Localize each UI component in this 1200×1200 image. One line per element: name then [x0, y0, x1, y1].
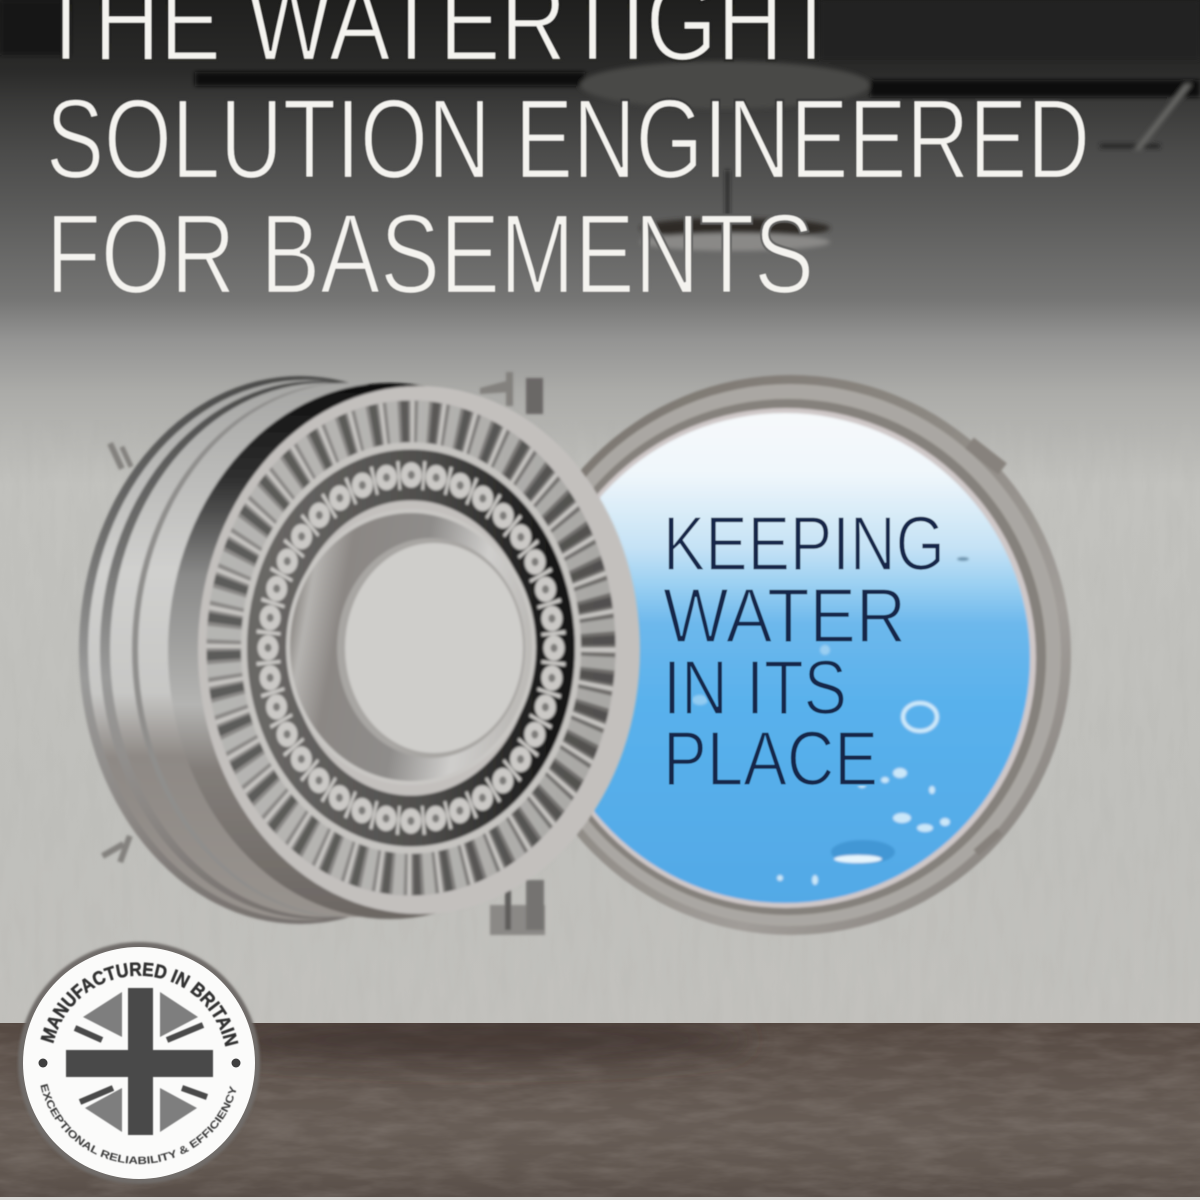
badge dots — [38, 1058, 48, 1068]
water window — [540, 413, 1030, 903]
badge disc — [18, 942, 260, 1184]
slogan — [663, 501, 945, 802]
hinges and bolts — [101, 372, 545, 935]
vault door — [79, 372, 640, 935]
water bubbles and splashes — [692, 557, 969, 885]
title — [38, 0, 1090, 317]
slogan: IN ITS — [663, 645, 847, 731]
floor — [0, 1023, 1200, 1197]
badge top text: MANUFACTURED IN BRITAIN — [40, 962, 239, 1048]
hub — [286, 509, 536, 785]
door body — [79, 376, 521, 924]
hub disc — [345, 543, 523, 753]
slogan: WATER — [663, 573, 906, 659]
badge bottom text: EXCEPTIONAL RELIABILITY & EFFICIENCY — [40, 1083, 237, 1165]
portal latch — [965, 438, 1007, 474]
door face — [198, 386, 640, 914]
slogan: PLACE — [663, 716, 878, 802]
floor shadow — [210, 1018, 750, 1062]
open vault portal — [511, 375, 1071, 935]
title: FOR BASEMENTS — [46, 191, 814, 317]
union flag icon — [66, 988, 213, 1135]
slogan: KEEPING — [663, 501, 945, 587]
ceiling details — [0, 0, 1200, 251]
badge: manufactured in Britain — [18, 940, 261, 1184]
bolt band — [268, 475, 554, 821]
spoke channel — [225, 423, 597, 873]
